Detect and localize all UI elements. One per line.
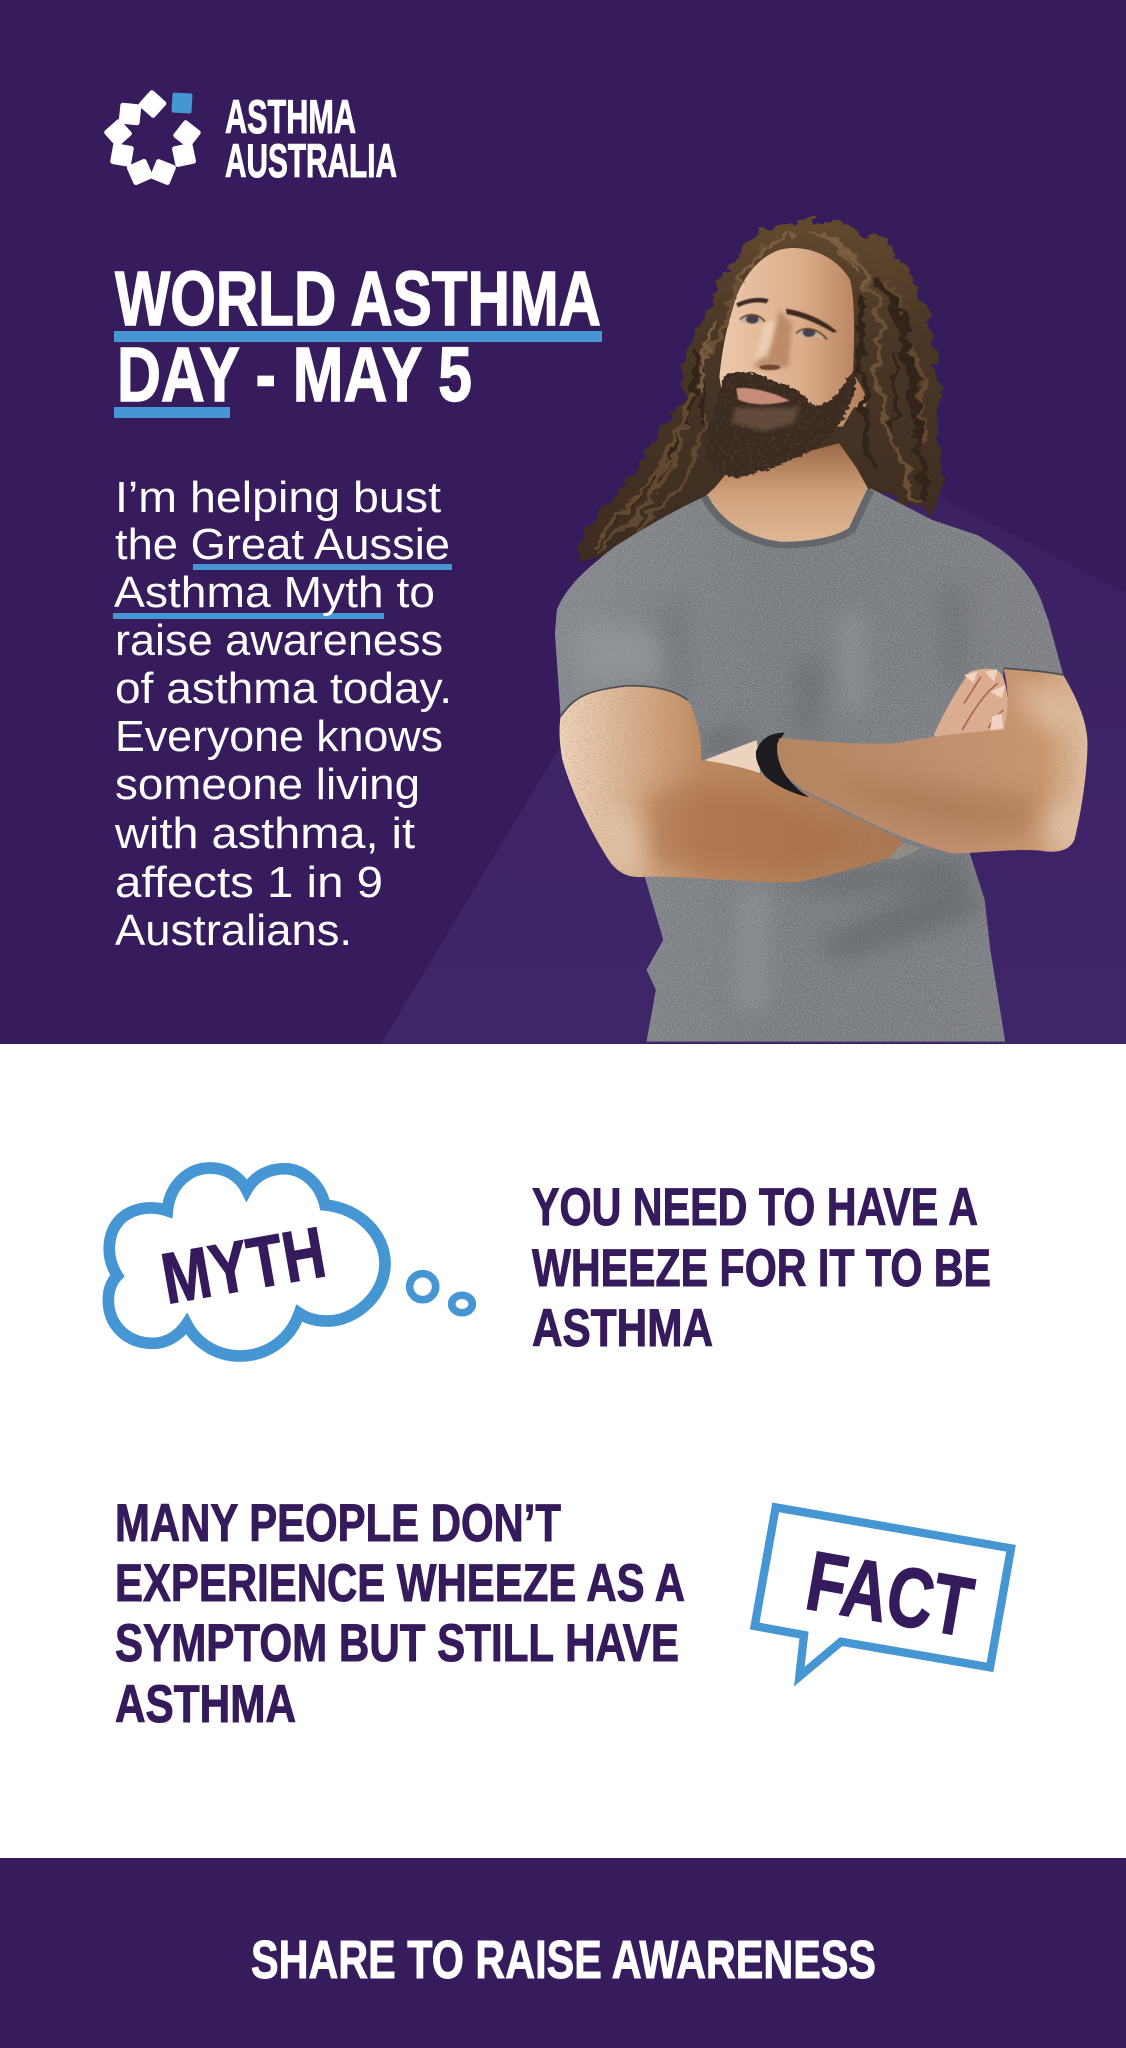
lips [736,388,790,404]
intro text block: someone living [115,760,420,809]
wristwatch [888,843,922,859]
fact statement: EXPERIENCE WHEEZE AS A [115,1554,685,1613]
label: MYTH: MYTH [156,1212,331,1320]
intro text block: raise awareness [115,616,443,665]
panel: footer band [0,1858,1126,2048]
intro text block: I’m helping bust [115,473,441,522]
fingers of the hand [934,669,1008,737]
title with blue underlines [114,256,602,418]
title with blue underlines: WORLD ASTHMA [115,256,601,342]
chin tone under the lip [732,407,800,432]
panel: purple hero background [0,0,1126,1044]
shirt fold shading [577,587,981,1010]
fact statement: ASTHMA [115,1675,296,1734]
hand underneath the arm [704,740,760,777]
intro text block: the Great Aussie [115,520,450,569]
intro text block: Everyone knows [115,712,443,761]
icon: fact speech bubble [755,1507,1011,1677]
left forearm and upper arm [560,686,902,882]
myth statement: WHEEZE FOR IT TO BE [532,1239,991,1298]
intro text block: Australians. [115,906,352,955]
fact statement [115,1494,685,1734]
logo wordmark [225,90,397,187]
intro text block [113,473,452,955]
illustration: man with crossed arms [555,220,1087,1042]
long curly hair, back layer [578,220,942,563]
nose highlight [755,320,775,360]
myth statement: YOU NEED TO HAVE A [532,1178,978,1237]
panel: white myth and fact section [0,1044,1126,1858]
label: FACT: FACT [800,1533,980,1655]
fact statement: MANY PEOPLE DON’T [115,1494,561,1553]
intro text block: of asthma today. [115,664,452,713]
title with blue underlines: DAY - MAY 5 [117,332,472,418]
myth statement [532,1178,991,1358]
intro text block: with asthma, it [114,809,415,858]
neck [704,443,871,546]
call to action: SHARE TO RAISE AWARENESS [251,1930,876,1990]
logo: Asthma Australia [103,89,397,187]
logo wordmark: AUSTRALIA [225,134,397,187]
front hair strands [604,230,925,547]
wristband [756,733,809,797]
eyes and eyebrows [736,298,837,339]
myth statement: ASTHMA [532,1299,713,1358]
grey t-shirt [555,488,1063,1042]
right forearm and upper arm [778,668,1087,853]
background lighter triangle [381,440,1126,1044]
beard [705,370,856,477]
face [719,248,866,427]
intro text block: affects 1 in 9 [115,858,383,907]
intro text block: Asthma Myth to [114,568,435,617]
fact statement: SYMPTOM BUT STILL HAVE [115,1614,679,1673]
nostril [759,365,780,370]
icon: ring of squares [103,89,202,186]
icon: myth thought cloud [108,1168,472,1356]
logo wordmark: ASTHMA [225,90,356,143]
shirt collar [704,490,871,545]
nose shadow [753,310,792,370]
